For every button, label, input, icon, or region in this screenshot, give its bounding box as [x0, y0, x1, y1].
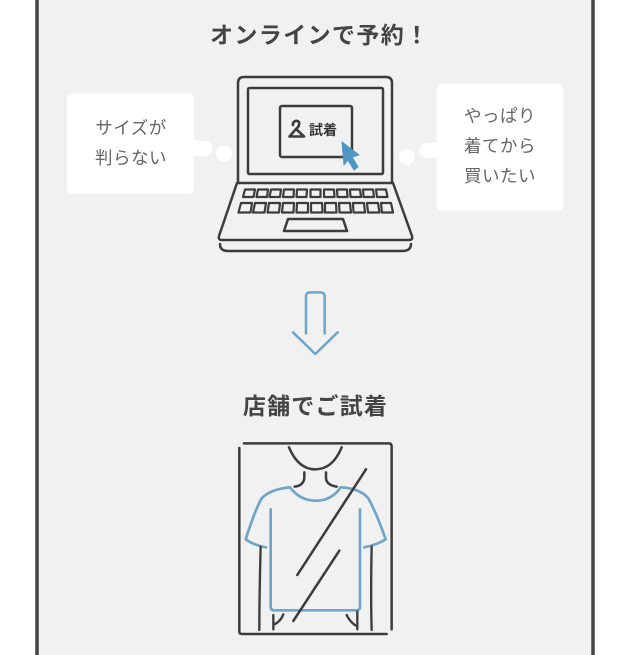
text: right bubble: 買いたい: [464, 166, 536, 186]
button label: 試着: [309, 122, 337, 138]
person: face and neck: [289, 447, 342, 487]
illustration: mirror with t-shirt: [239, 443, 392, 634]
text: right bubble: 着てから: [464, 136, 536, 156]
icon: cursor: [342, 142, 359, 170]
speech bubble: left: [67, 93, 232, 194]
t-shirt: [246, 487, 386, 610]
heading: try on in store: 店舗でご試着: [243, 393, 388, 419]
laptop bottom lip: [220, 244, 411, 251]
laptop lid: [238, 77, 392, 182]
mirror frame: [239, 443, 392, 634]
laptop screen: [248, 88, 383, 174]
text: left bubble: サイズが: [95, 118, 167, 138]
text: right bubble: やっぱり: [464, 106, 536, 126]
heading: online reservation: オンラインで予約！: [210, 22, 430, 48]
laptop base: [219, 183, 412, 240]
trackpad: [284, 219, 347, 231]
text: left bubble: 判らない: [95, 148, 167, 168]
keyboard: [238, 190, 393, 212]
person: arms and hands: [259, 547, 372, 630]
speech bubble: right: [399, 84, 563, 211]
icon: hanger: [290, 121, 304, 136]
icon: laptop: [219, 77, 412, 251]
dialog: try-on button: [280, 106, 352, 157]
arrow: down: [293, 292, 338, 354]
mirror reflection lines: [293, 469, 366, 621]
